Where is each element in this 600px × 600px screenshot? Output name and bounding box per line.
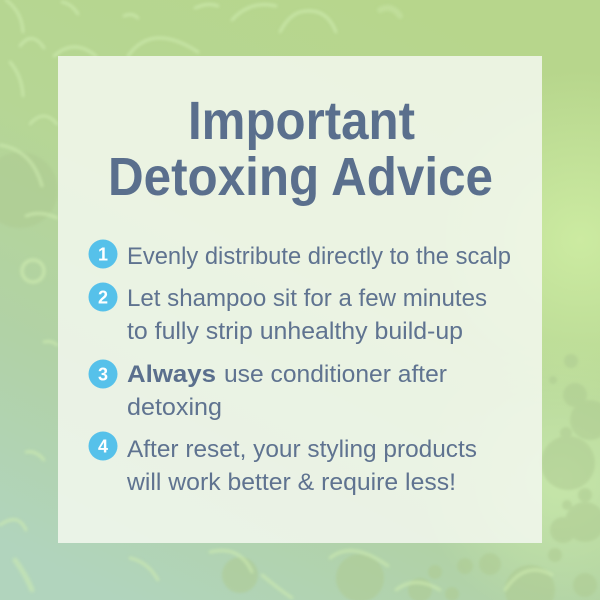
panel: advice card (58, 56, 542, 543)
step 3: use conditioner after (224, 361, 447, 388)
step 1: 1 (98, 244, 108, 264)
step 3: 3 (98, 364, 108, 384)
step 4: will work better & require less! (126, 469, 456, 496)
step 4: 4 (98, 436, 108, 456)
step 3: detoxing (127, 394, 222, 421)
title: Detoxing Advice (108, 147, 493, 207)
step 2 (88, 282, 487, 345)
step 3: Always (127, 361, 216, 388)
step 4: After reset, your styling products (127, 436, 477, 463)
step 3 (88, 360, 447, 421)
step 1: Evenly distribute directly to the scalp (127, 243, 511, 270)
step 2: Let shampoo sit for a few minutes (127, 285, 487, 312)
step 2: to fully strip unhealthy build-up (127, 318, 463, 345)
step 2: 2 (98, 288, 108, 308)
title (108, 91, 493, 207)
step 4 (88, 432, 477, 496)
title: Important (188, 91, 415, 151)
